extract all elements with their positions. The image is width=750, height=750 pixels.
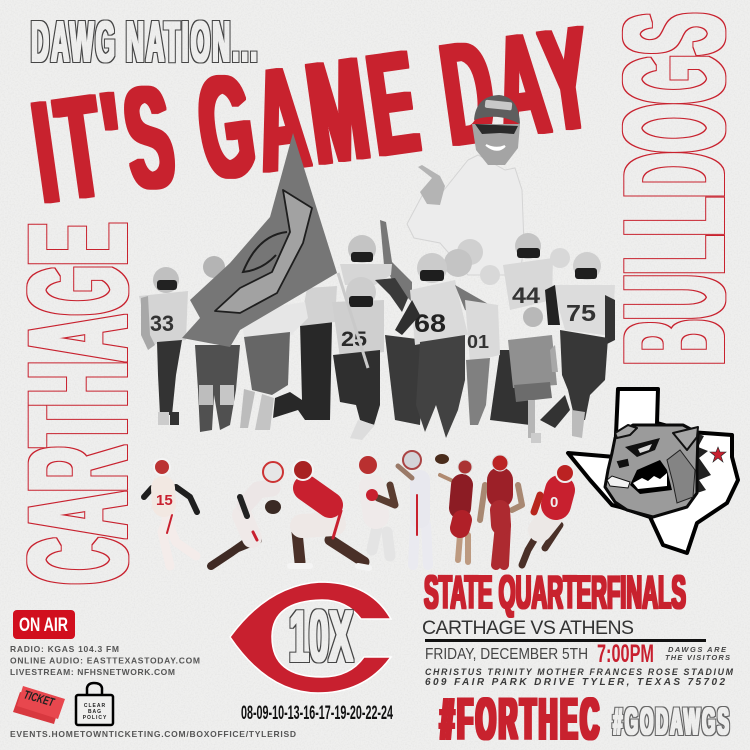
open mouth bbox=[630, 460, 672, 494]
icon: texas map with bulldog mascot bbox=[568, 389, 738, 553]
heading: dawg nation: DAWG NATION... bbox=[31, 11, 257, 74]
player 68: 68 bbox=[414, 310, 446, 338]
back player with helmet bbox=[340, 235, 408, 312]
icon: clear bag policy: POLICY bbox=[83, 715, 107, 721]
player 68 bbox=[395, 253, 492, 438]
player behind flag bbox=[195, 256, 240, 432]
badge: on air bbox=[13, 610, 75, 639]
visitors note: THE VISITORS bbox=[665, 653, 730, 662]
visitors note: DAWGS ARE bbox=[668, 645, 727, 654]
player 25: 25 bbox=[341, 328, 367, 351]
bulldog head bbox=[605, 425, 698, 517]
photo: team flag bbox=[182, 133, 337, 347]
spiked collar bbox=[694, 433, 711, 494]
player 44 bbox=[503, 233, 553, 310]
action player 15 bbox=[144, 459, 197, 566]
player 44: 44 bbox=[512, 283, 541, 308]
player 33: 33 bbox=[150, 311, 174, 336]
game time: 7:00PM bbox=[597, 640, 654, 668]
dark back rows bbox=[273, 220, 570, 425]
broadcast info: ONLINE AUDIO: EASTTEXASTODAY.COM bbox=[10, 656, 200, 666]
action player 4 bbox=[358, 455, 395, 556]
broadcast info: RADIO: KGAS 104.3 FM bbox=[10, 644, 119, 654]
icon: clear bag policy: CLEAR bbox=[84, 703, 106, 709]
icon: tickets bbox=[13, 686, 65, 724]
player 33 bbox=[139, 267, 188, 425]
action player 15: 15 bbox=[156, 492, 173, 509]
game date: FRIDAY, DECEMBER 5TH bbox=[425, 646, 588, 663]
action player 5 bbox=[398, 451, 428, 565]
icon: tickets: TICKET bbox=[22, 687, 57, 710]
visitors note bbox=[665, 645, 730, 662]
action player 8 bbox=[290, 460, 369, 568]
logo: red C with 10X: 10X bbox=[289, 597, 353, 677]
ears bbox=[615, 425, 698, 450]
hashtag: godawgs: #GODAWGS bbox=[613, 702, 729, 743]
action player 0: 0 bbox=[550, 494, 558, 511]
logo: red C with 10X bbox=[230, 582, 391, 693]
action player 6 quarterback bbox=[435, 454, 472, 562]
stadium address bbox=[425, 667, 734, 688]
player 01: 01 bbox=[467, 332, 489, 352]
kid running bbox=[508, 307, 558, 443]
championship years: 08-09-10-13-16-17-19-20-22-24 bbox=[241, 703, 393, 724]
title: it's game day: IT'S GAME DAY bbox=[25, 0, 600, 234]
player 75: 75 bbox=[566, 300, 596, 326]
ticket url: EVENTS.HOMETOWNTICKETING.COM/BOXOFFICE/TYLERISD bbox=[10, 729, 296, 739]
eye and nose bbox=[625, 438, 660, 457]
texas outline bbox=[568, 389, 738, 553]
photo: team running onto field bbox=[139, 220, 615, 443]
divider line bbox=[425, 639, 706, 642]
photo: coach pointing bbox=[407, 95, 524, 275]
red star bbox=[710, 447, 726, 462]
player 75 bbox=[540, 252, 615, 438]
stadium address: CHRISTUS TRINITY MOTHER FRANCES ROSE STADIUM bbox=[425, 667, 734, 677]
player 01 bbox=[465, 300, 500, 425]
player 25 bbox=[332, 273, 384, 440]
action player 0 bbox=[522, 464, 574, 565]
action player 12 bbox=[211, 462, 283, 566]
stadium address: 609 FAIR PARK DRIVE TYLER, TEXAS 75702 bbox=[425, 677, 725, 688]
icon: clear bag policy: BAG bbox=[88, 709, 102, 715]
action player 2 bbox=[480, 455, 522, 565]
jowl bbox=[667, 450, 695, 503]
matchup: CARTHAGE VS ATHENS bbox=[422, 617, 634, 639]
broadcast info: LIVESTREAM: NFHSNETWORK.COM bbox=[10, 667, 175, 677]
broadcast info bbox=[10, 644, 200, 677]
player in white jersey bbox=[240, 302, 308, 430]
badge: on air: ON AIR bbox=[19, 615, 68, 636]
icon: clear bag policy bbox=[76, 683, 113, 725]
